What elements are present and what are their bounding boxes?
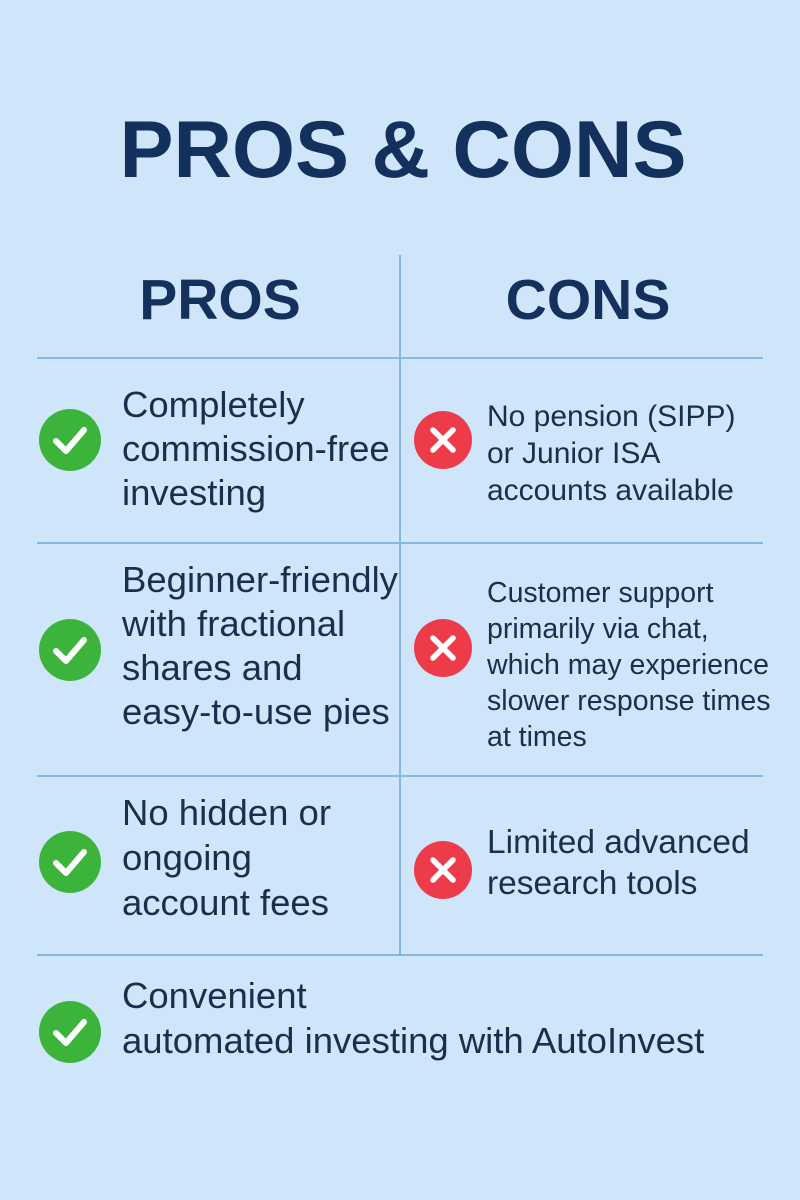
pro 3 text: No hidden or — [122, 792, 331, 833]
con 3 text: research tools — [487, 865, 697, 902]
pro 1 text: investing — [122, 472, 266, 513]
con 2 text: primarily via chat, — [487, 613, 709, 645]
con 2 text: at times — [487, 721, 587, 753]
pro 1 text: commission-free — [122, 428, 390, 469]
pro 1 text — [122, 384, 390, 513]
pro 2 text — [122, 559, 398, 732]
heading: cons: CONS — [506, 268, 670, 332]
con 2 text — [487, 577, 771, 753]
con 1 text — [487, 400, 735, 507]
con 2 text: Customer support — [487, 577, 714, 609]
con 1 text: No pension (SIPP) — [487, 400, 735, 433]
pro 2 text: Beginner-friendly — [122, 559, 398, 600]
title: PROS & CONS — [119, 105, 687, 195]
icon: check 2 — [39, 619, 101, 681]
icon: check 4 — [39, 1001, 101, 1063]
con 1 text: accounts available — [487, 474, 734, 507]
pro 2 text: with fractional — [122, 603, 345, 644]
heading: pros: PROS — [139, 268, 301, 332]
pro 4 text — [122, 975, 704, 1061]
pro 4 text: automated investing with AutoInvest — [122, 1020, 704, 1061]
pro 3 text: ongoing — [122, 837, 252, 878]
con 1 text: or Junior ISA — [487, 437, 660, 470]
con 2 text: which may experience — [487, 649, 769, 681]
pro 1 text: Completely — [122, 384, 305, 425]
con 3 text — [487, 824, 750, 902]
pro 4 text: Convenient — [122, 975, 307, 1016]
pro 2 text: easy-to-use pies — [122, 691, 390, 732]
con 3 text: Limited advanced — [487, 824, 750, 861]
icon: cross 1 — [414, 411, 472, 469]
icon: cross 2 — [414, 619, 472, 677]
icon: cross 3 — [414, 841, 472, 899]
pro 3 text: account fees — [122, 882, 329, 923]
icon: check 3 — [39, 831, 101, 893]
pro 2 text: shares and — [122, 647, 303, 688]
pro 3 text — [122, 792, 331, 923]
con 2 text: slower response times — [487, 685, 771, 717]
icon: check 1 — [39, 409, 101, 471]
